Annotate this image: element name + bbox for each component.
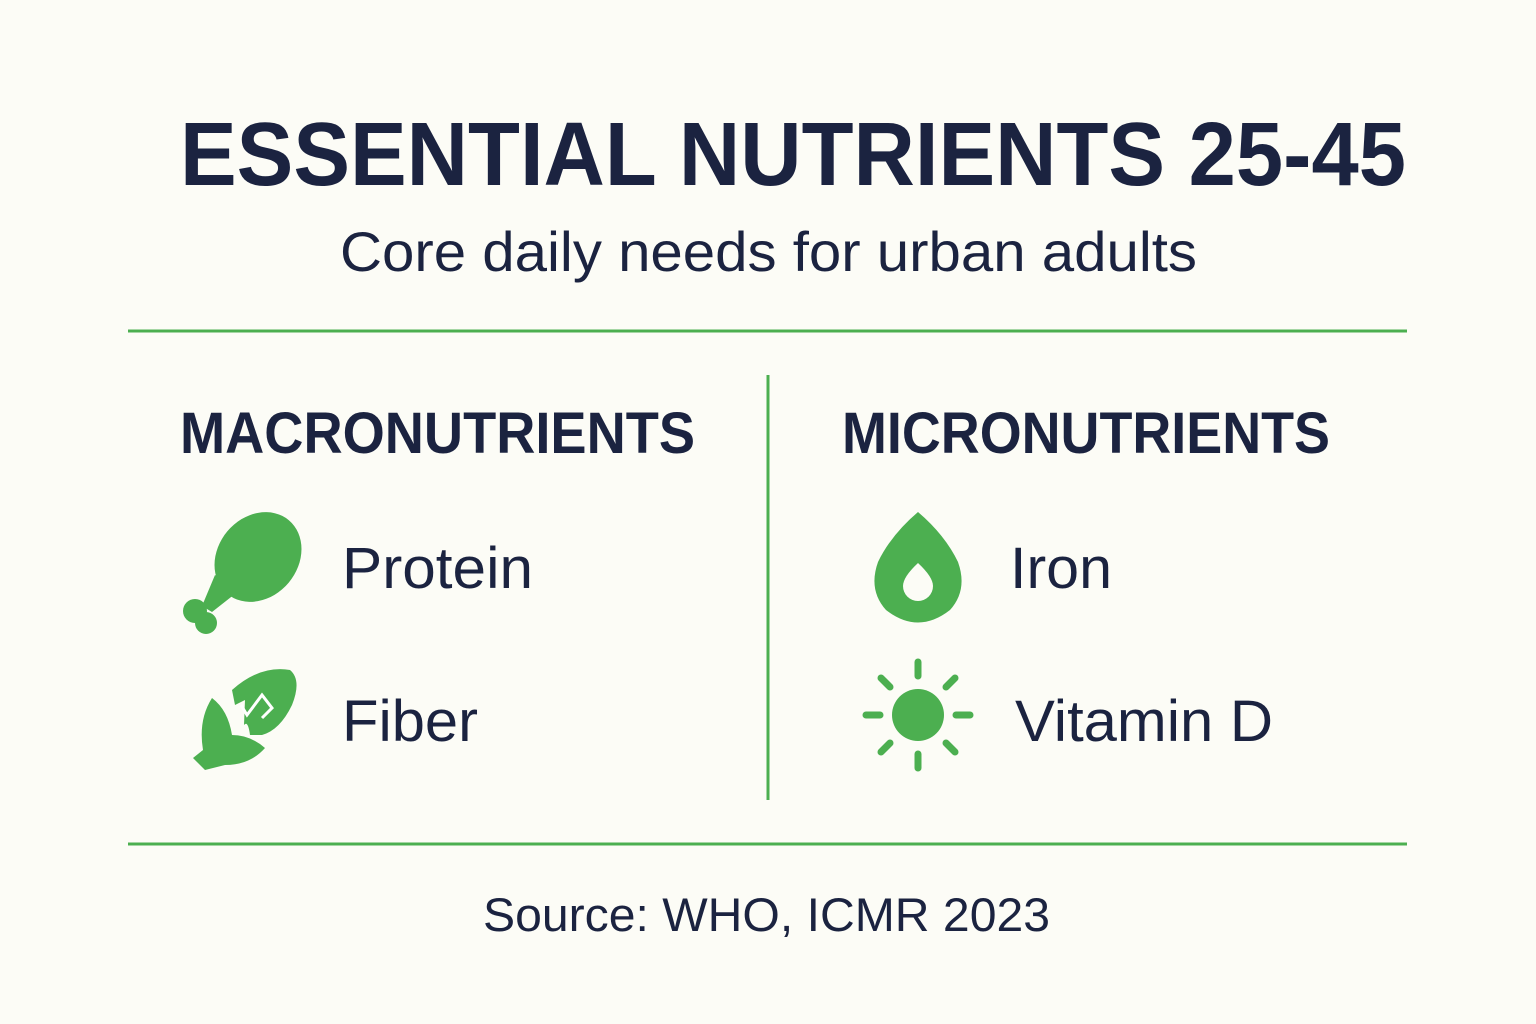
icon: sun xyxy=(866,662,970,768)
subtitle: Core daily needs for urban adults xyxy=(340,220,1197,283)
label: iron: Iron xyxy=(1010,536,1112,601)
label: fiber: Fiber xyxy=(342,689,478,754)
panel: macronutrients xyxy=(180,401,695,770)
title: ESSENTIAL NUTRIENTS 25-45 xyxy=(180,105,1406,205)
source: Source: WHO, ICMR 2023 xyxy=(483,888,1050,941)
icon: drumstick xyxy=(183,495,319,634)
heading: micronutrients: MICRONUTRIENTS xyxy=(842,401,1330,466)
label: protein: Protein xyxy=(342,536,533,601)
icon: iron drop xyxy=(874,512,962,622)
heading: macronutrients: MACRONUTRIENTS xyxy=(180,401,695,466)
icon: fiber leaves xyxy=(193,669,297,770)
label: vitamin d: Vitamin D xyxy=(1015,689,1273,754)
panel: micronutrients xyxy=(842,401,1330,768)
